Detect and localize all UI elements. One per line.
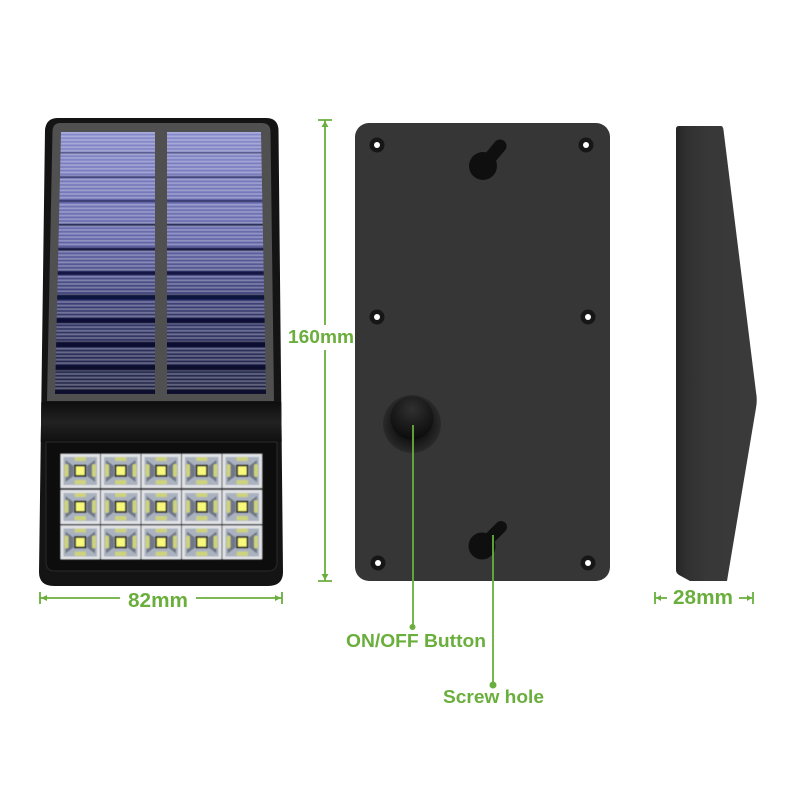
solar panel frame <box>47 123 274 401</box>
ON/OFF button <box>383 395 441 453</box>
dimension: height 160mm <box>288 120 354 581</box>
dimension: width 82mm: 82mm <box>128 589 188 612</box>
panel: back view <box>355 123 610 581</box>
LED array <box>60 453 263 560</box>
front body housing <box>39 118 283 586</box>
back plate <box>355 123 610 581</box>
dimension: height 160mm: 160mm <box>288 326 354 347</box>
panel: front view of solar light <box>36 118 286 586</box>
callout: ON/OFF Button <box>346 425 486 651</box>
dimension: depth 28mm: 28mm <box>673 586 733 609</box>
callout: Screw hole <box>443 535 544 707</box>
top keyhole <box>469 146 500 180</box>
bottom keyhole <box>468 527 501 560</box>
callout: Screw hole: Screw hole <box>443 687 544 707</box>
panel: side view <box>676 126 757 581</box>
dimension: width 82mm <box>40 589 282 612</box>
mounting holes <box>370 138 596 570</box>
LED recess <box>46 442 277 571</box>
solar panel cells <box>50 130 270 396</box>
dimension: depth 28mm <box>655 586 753 609</box>
callout: ON/OFF Button: ON/OFF Button <box>346 631 486 651</box>
shoulder below solar panel <box>36 402 286 442</box>
